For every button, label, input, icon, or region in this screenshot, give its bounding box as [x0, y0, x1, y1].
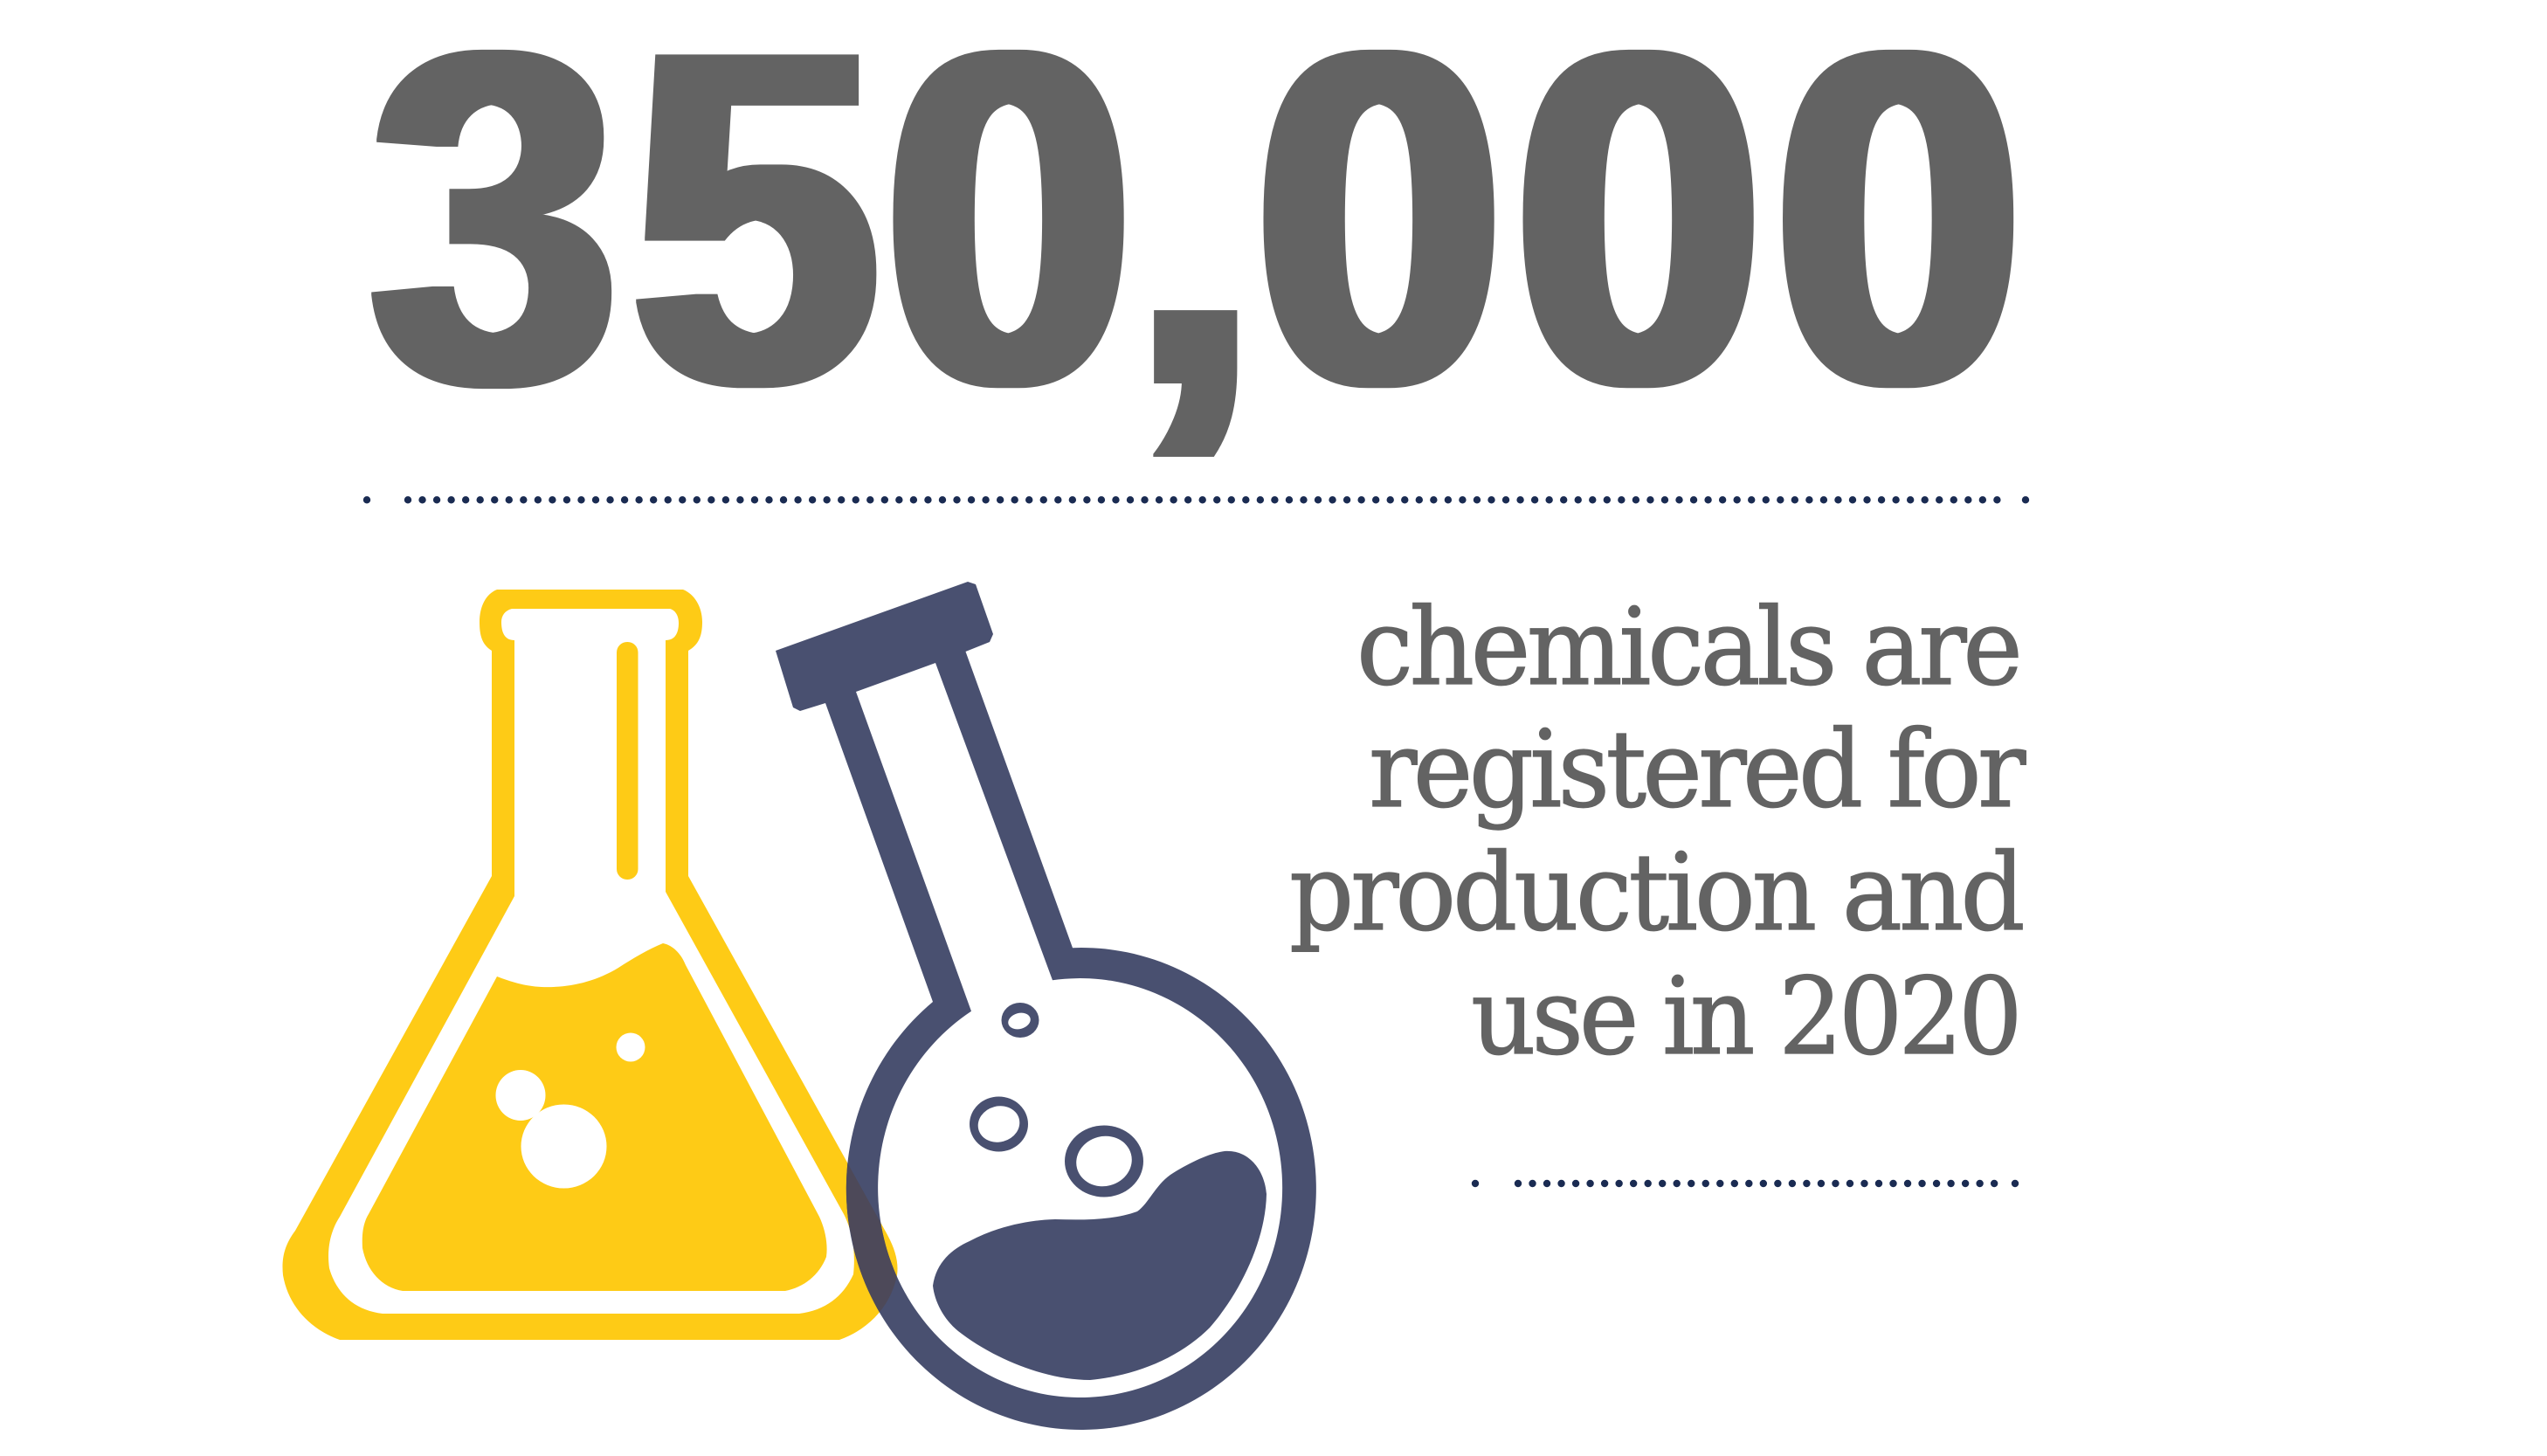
infographic canvas: [283, 49, 2030, 1430]
top dotted divider: [363, 496, 2029, 503]
bubbles: [496, 1032, 645, 1188]
description text: chemicals are: [1356, 585, 2023, 709]
flask liquid: [362, 943, 827, 1291]
icon: navy round-bottom flask: [776, 582, 1316, 1430]
description text: use in 2020: [1471, 955, 2023, 1079]
flask outline: [776, 582, 1316, 1430]
flask outline: [283, 590, 897, 1340]
flask liquid: [933, 1151, 1267, 1380]
overlap with yellow flask: [846, 1163, 897, 1312]
description text: production and: [1289, 831, 2026, 955]
description text: [1289, 585, 2026, 1079]
bottom dotted divider: [1472, 1180, 2019, 1187]
bubble rings: [970, 1003, 1143, 1197]
measuring tube: [617, 642, 638, 880]
icon: yellow conical flask: [283, 590, 897, 1340]
description text: registered for: [1369, 707, 2026, 832]
